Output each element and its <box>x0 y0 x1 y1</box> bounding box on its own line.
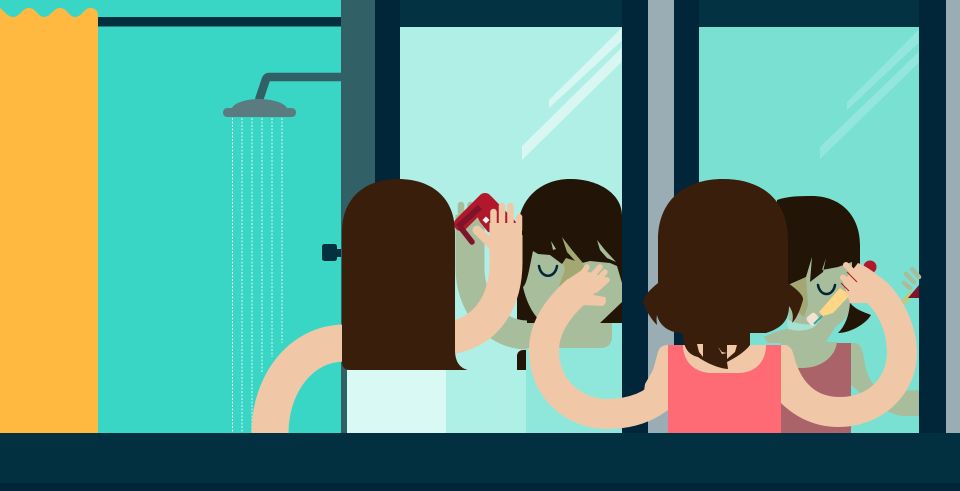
left woman arm behind body <box>270 343 345 433</box>
shower water streams <box>232 118 282 433</box>
reflection: neck and shoulders <box>764 310 846 368</box>
shower curtain rod <box>96 17 342 26</box>
front woman hair gaps <box>697 344 737 359</box>
left woman raised arm <box>450 235 506 338</box>
reflection: chin highlight <box>787 319 817 331</box>
reflection: far shoulder and arm <box>851 343 919 416</box>
floor shadow band <box>0 483 960 491</box>
reflection: neck and shoulder <box>526 323 612 348</box>
reflection: face <box>523 251 622 323</box>
front woman reaching arm <box>544 290 674 414</box>
shower faucet knob <box>322 244 341 261</box>
floor <box>0 433 960 483</box>
front woman right arm and hand <box>781 263 917 427</box>
reflection: shirt <box>526 323 622 433</box>
reflection: bangs <box>523 235 622 283</box>
left woman shirt <box>347 370 446 433</box>
reflection: closed eye <box>818 285 835 294</box>
front woman second hand fingers <box>841 265 866 293</box>
reflection: tank top <box>781 343 851 433</box>
left mirror glass <box>400 27 622 433</box>
right mirror frame <box>674 0 960 433</box>
front woman first hand <box>543 267 608 323</box>
left woman hand <box>477 206 522 262</box>
reflection: lower hair tuft <box>838 303 871 333</box>
shower curtain <box>0 8 98 433</box>
reflection: far hair lock <box>517 350 537 378</box>
reflection: nose shadow <box>559 258 586 286</box>
toothbrush <box>805 287 851 327</box>
far hand reflection <box>903 269 919 303</box>
right mirror glass <box>699 27 919 433</box>
front woman neck and back <box>683 345 766 373</box>
reflection: hair slivers <box>551 237 616 263</box>
reflection of shirt <box>446 370 526 433</box>
grey wall strip <box>648 0 674 433</box>
reflection: face <box>788 257 852 333</box>
reflection: hair <box>517 179 622 323</box>
shower head <box>223 99 296 117</box>
red comb fragment held by reflection <box>864 260 876 274</box>
reflection: raised arm <box>470 215 527 335</box>
reflection: nose shadow <box>787 277 808 317</box>
left mirror glare <box>522 28 622 160</box>
reflection of woman with comb <box>461 179 622 433</box>
front woman left shoulder <box>640 345 668 420</box>
left mirror frame and door <box>341 0 648 433</box>
reflection: hair <box>777 196 860 300</box>
right mirror glare <box>820 30 918 159</box>
reflection: fingers <box>461 205 470 225</box>
shower pipe <box>259 77 342 100</box>
comb <box>458 196 518 242</box>
front woman tank top <box>668 345 781 433</box>
reflection of woman with toothbrush <box>764 196 919 433</box>
left woman long hair <box>342 179 468 370</box>
reflection: closed eye <box>539 266 557 276</box>
front woman wavy hair <box>643 179 803 369</box>
